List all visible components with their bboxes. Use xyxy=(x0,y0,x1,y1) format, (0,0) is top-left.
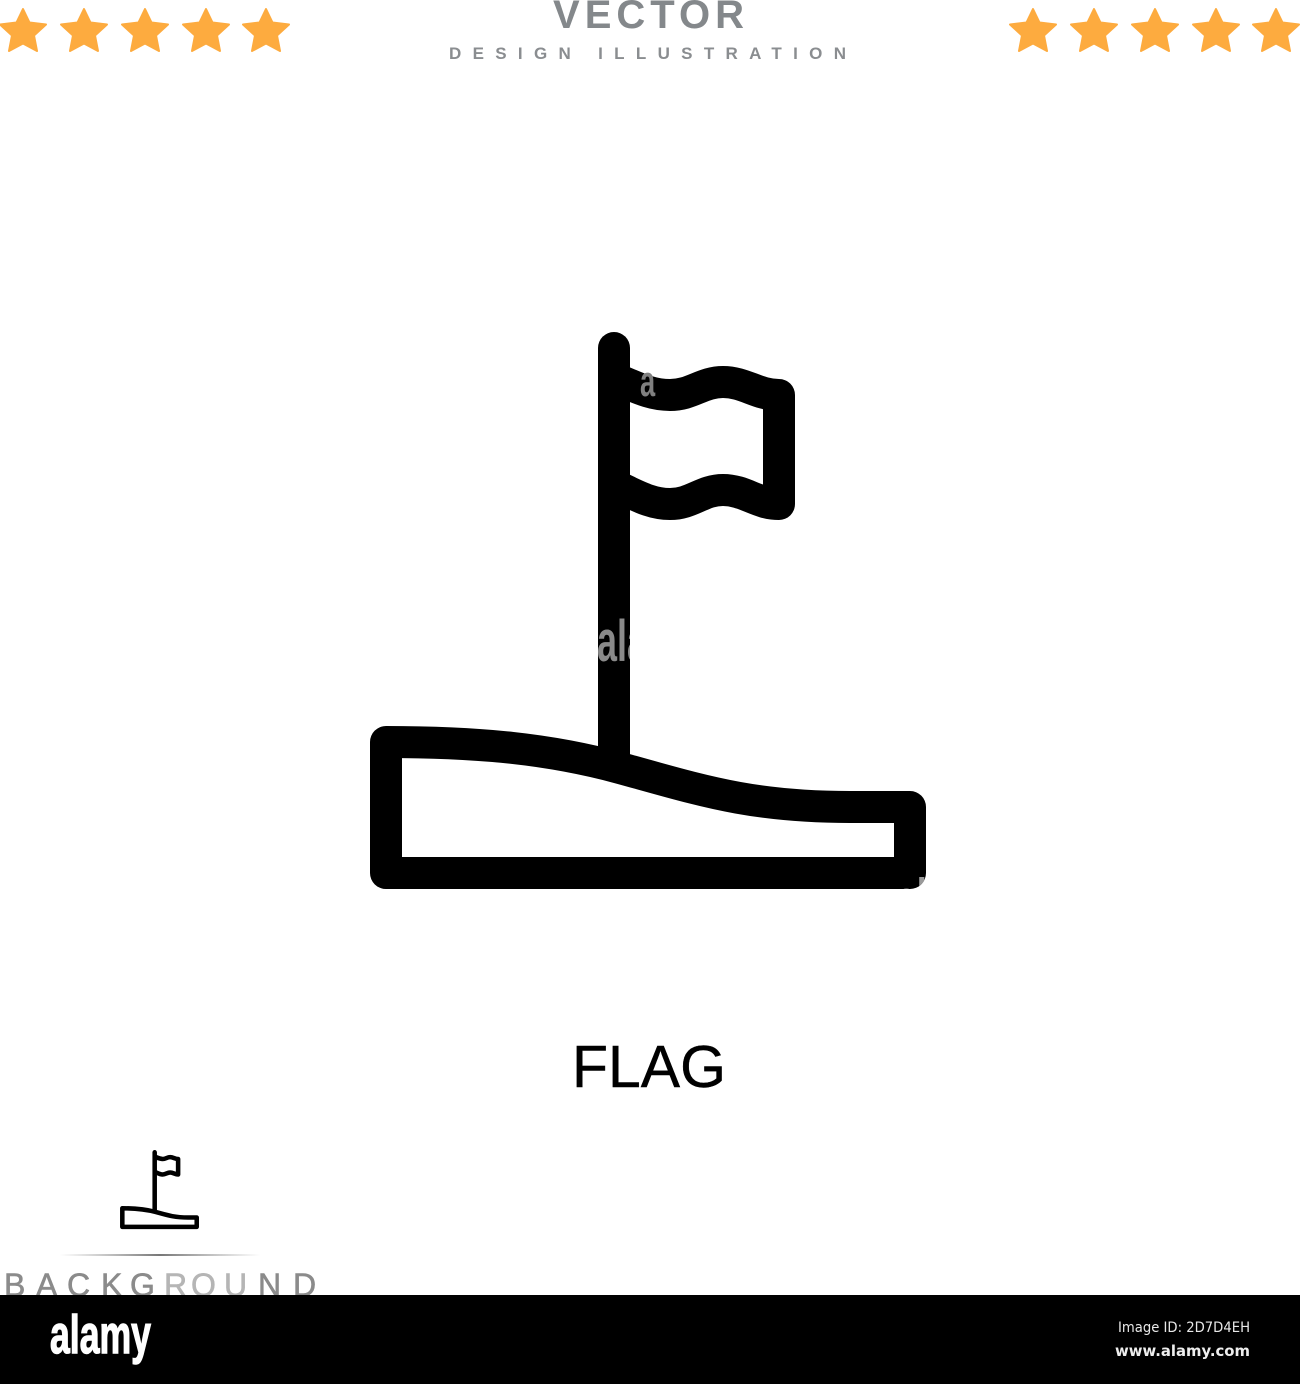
hill base xyxy=(386,742,910,873)
flag cloth xyxy=(614,378,779,504)
subheading: DESIGN ILLUSTRATION: DESIGN ILLUSTRATION xyxy=(449,44,846,63)
divider line xyxy=(60,1254,260,1256)
text: BACKGROUND xyxy=(6,1273,315,1295)
website: www.alamy.com xyxy=(1115,1342,1250,1360)
image id: Image ID: 2D7D4EH xyxy=(1118,1320,1250,1336)
icon: large flag on hill xyxy=(386,348,910,873)
watermark fragment on pole: ala xyxy=(597,609,648,674)
stars: right rating xyxy=(1010,9,1299,51)
footer bar xyxy=(0,1295,1300,1384)
text: BACKGROUND: BACKG xyxy=(4,1267,155,1303)
title: FLAG: FLAG xyxy=(572,1034,726,1100)
stars: left rating xyxy=(0,9,289,51)
watermark fragment on flag: a xyxy=(640,356,656,406)
text: BACKGROUND: ND xyxy=(258,1267,316,1303)
flag pole xyxy=(598,348,630,762)
logo: alamy: alamy xyxy=(50,1305,151,1365)
text: BACKGROUND: ROU xyxy=(164,1267,247,1303)
icon: small flag on hill xyxy=(122,1152,197,1227)
watermark fragment on hill corner: al xyxy=(896,867,927,934)
